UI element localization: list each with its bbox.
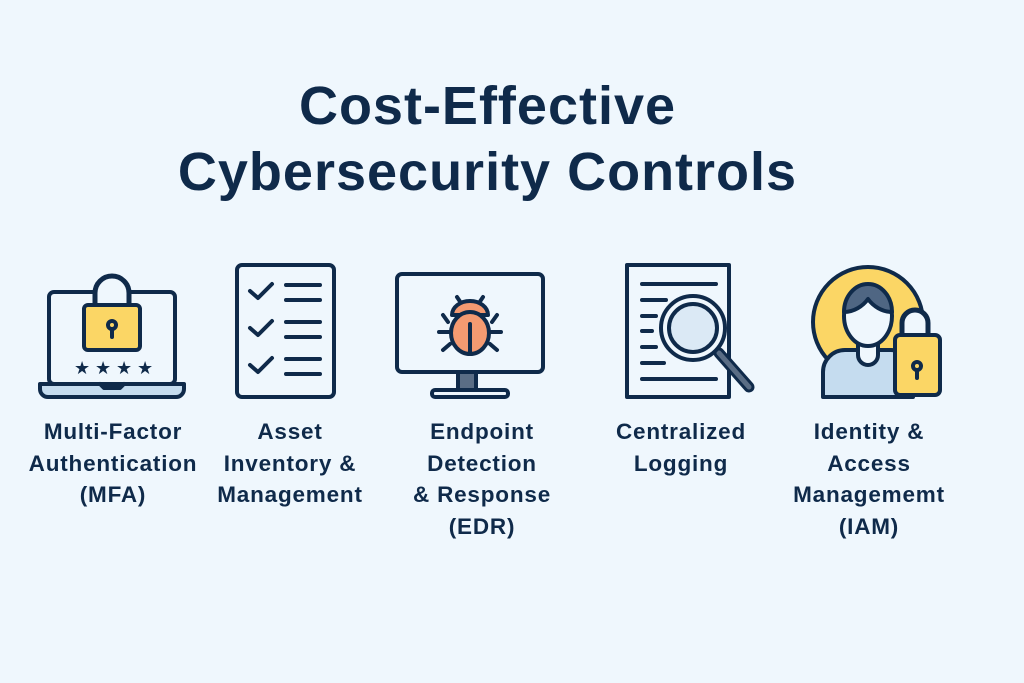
icon: laptop with lock: ★ [116,358,132,379]
label: MFA: (MFA) [80,482,146,507]
icon: checklist [237,265,334,397]
label: IAM: Identity & [814,419,924,444]
label: EDR: Endpoint [430,419,534,444]
label: EDR: & Response [413,482,551,507]
label: IAM: (IAM) [839,514,899,538]
title: Cost-Effective [299,76,676,136]
icon: document with magnifier [627,265,749,397]
label: logging [616,419,746,476]
icon: user with lock [813,267,940,397]
title: Cybersecurity Controls [178,142,797,202]
label: asset inventory: Management [217,482,363,507]
label: logging: Logging [634,450,728,476]
icon: laptop with lock: ★ [74,358,90,379]
label: MFA: Multi-Factor [44,419,182,444]
label: IAM [793,419,945,538]
label: asset inventory [217,419,363,507]
label: MFA: Authentication [29,450,197,476]
icon: laptop with lock: ★ [137,358,153,379]
label: MFA [29,419,197,507]
label: asset inventory: Inventory & [224,450,356,476]
label: EDR: (EDR) [449,514,515,538]
label: asset inventory: Asset [257,419,323,444]
label: IAM: Managememt [793,482,945,507]
label: EDR: Detection [427,450,537,476]
icon: laptop with lock [40,276,184,397]
label: logging: Centralized [616,419,746,444]
label: IAM: Access [827,450,911,476]
icon: monitor with bug [397,274,543,397]
icon: laptop with lock: ★ [95,358,111,379]
label: EDR [413,419,551,538]
title [178,76,797,202]
